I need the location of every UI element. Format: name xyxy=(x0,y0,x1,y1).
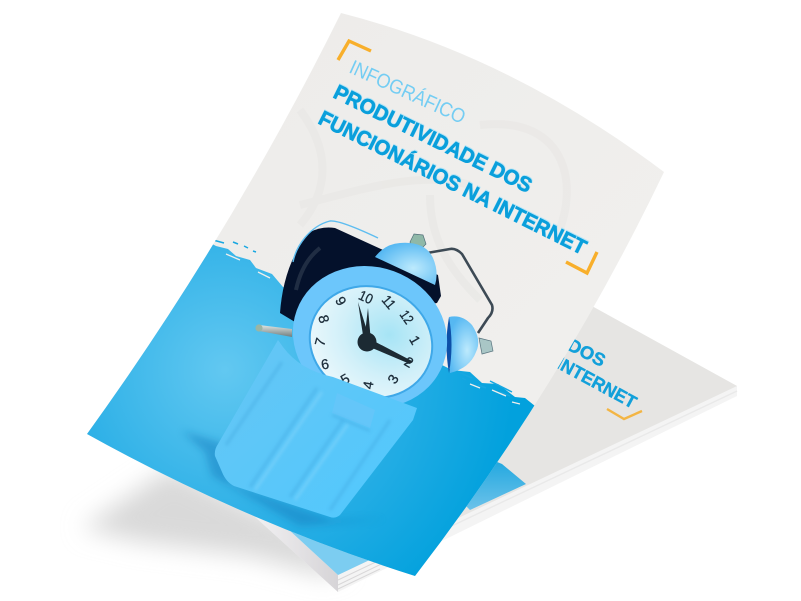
clock numerals: 8 xyxy=(315,313,333,325)
brush white flecks xyxy=(226,254,520,404)
clock numerals: 12 xyxy=(397,307,417,327)
clock numerals: 4 xyxy=(359,380,377,390)
ground shadow xyxy=(82,468,345,576)
clock numerals: 6 xyxy=(320,355,330,373)
blue lower section xyxy=(87,244,534,576)
side pin xyxy=(259,325,292,337)
clock numerals xyxy=(311,287,424,390)
clock rim xyxy=(273,245,467,429)
trash can rib highlights xyxy=(255,392,348,500)
clock numerals: 1 xyxy=(406,333,424,348)
bracket top left xyxy=(338,41,371,60)
back magazine xyxy=(253,305,737,592)
back cover title: INTERNET xyxy=(553,353,640,413)
title line two: FUNCIONÁRIOS NA INTERNET xyxy=(315,107,590,260)
nut right xyxy=(479,338,493,354)
alarm clock xyxy=(255,221,493,429)
trash can cast shadow xyxy=(186,432,334,527)
front cover xyxy=(87,13,664,576)
bracket bottom right xyxy=(566,252,597,273)
clock numerals: 11 xyxy=(379,292,399,312)
back cover title: DOS xyxy=(564,335,609,371)
clock face xyxy=(295,270,447,414)
paper background xyxy=(213,13,664,560)
clock numerals: 5 xyxy=(338,370,353,388)
back magazine page stack xyxy=(253,305,737,592)
clock hands xyxy=(358,302,412,364)
trash can body xyxy=(215,340,417,518)
trash can handle xyxy=(332,393,375,428)
clock numerals: 2 xyxy=(402,353,417,371)
wire handle xyxy=(427,249,492,333)
title line one: PRODUTIVIDADE DOS xyxy=(330,80,536,197)
back cover blue strips xyxy=(290,462,526,575)
trash can ribs xyxy=(226,362,390,510)
bell right xyxy=(449,316,478,373)
clock back body xyxy=(280,228,441,325)
clock numerals: 7 xyxy=(311,336,329,348)
bell top xyxy=(375,243,437,285)
title line two: FUNCIONÁRIOS NA INTERNET xyxy=(315,106,590,259)
heading xyxy=(315,41,597,273)
clock numerals: 10 xyxy=(356,287,376,307)
title kicker: INFOGRÁFICO xyxy=(346,56,469,129)
brush flecks xyxy=(213,240,512,396)
back magazine cover xyxy=(287,305,737,575)
back cover bracket xyxy=(607,409,642,419)
title line one: PRODUTIVIDADE DOS xyxy=(330,81,536,198)
paper swirl pattern xyxy=(300,110,567,300)
trash can xyxy=(215,340,417,518)
clock numerals: 3 xyxy=(384,371,402,386)
nut top xyxy=(410,234,426,250)
clock numerals: 9 xyxy=(332,294,350,309)
